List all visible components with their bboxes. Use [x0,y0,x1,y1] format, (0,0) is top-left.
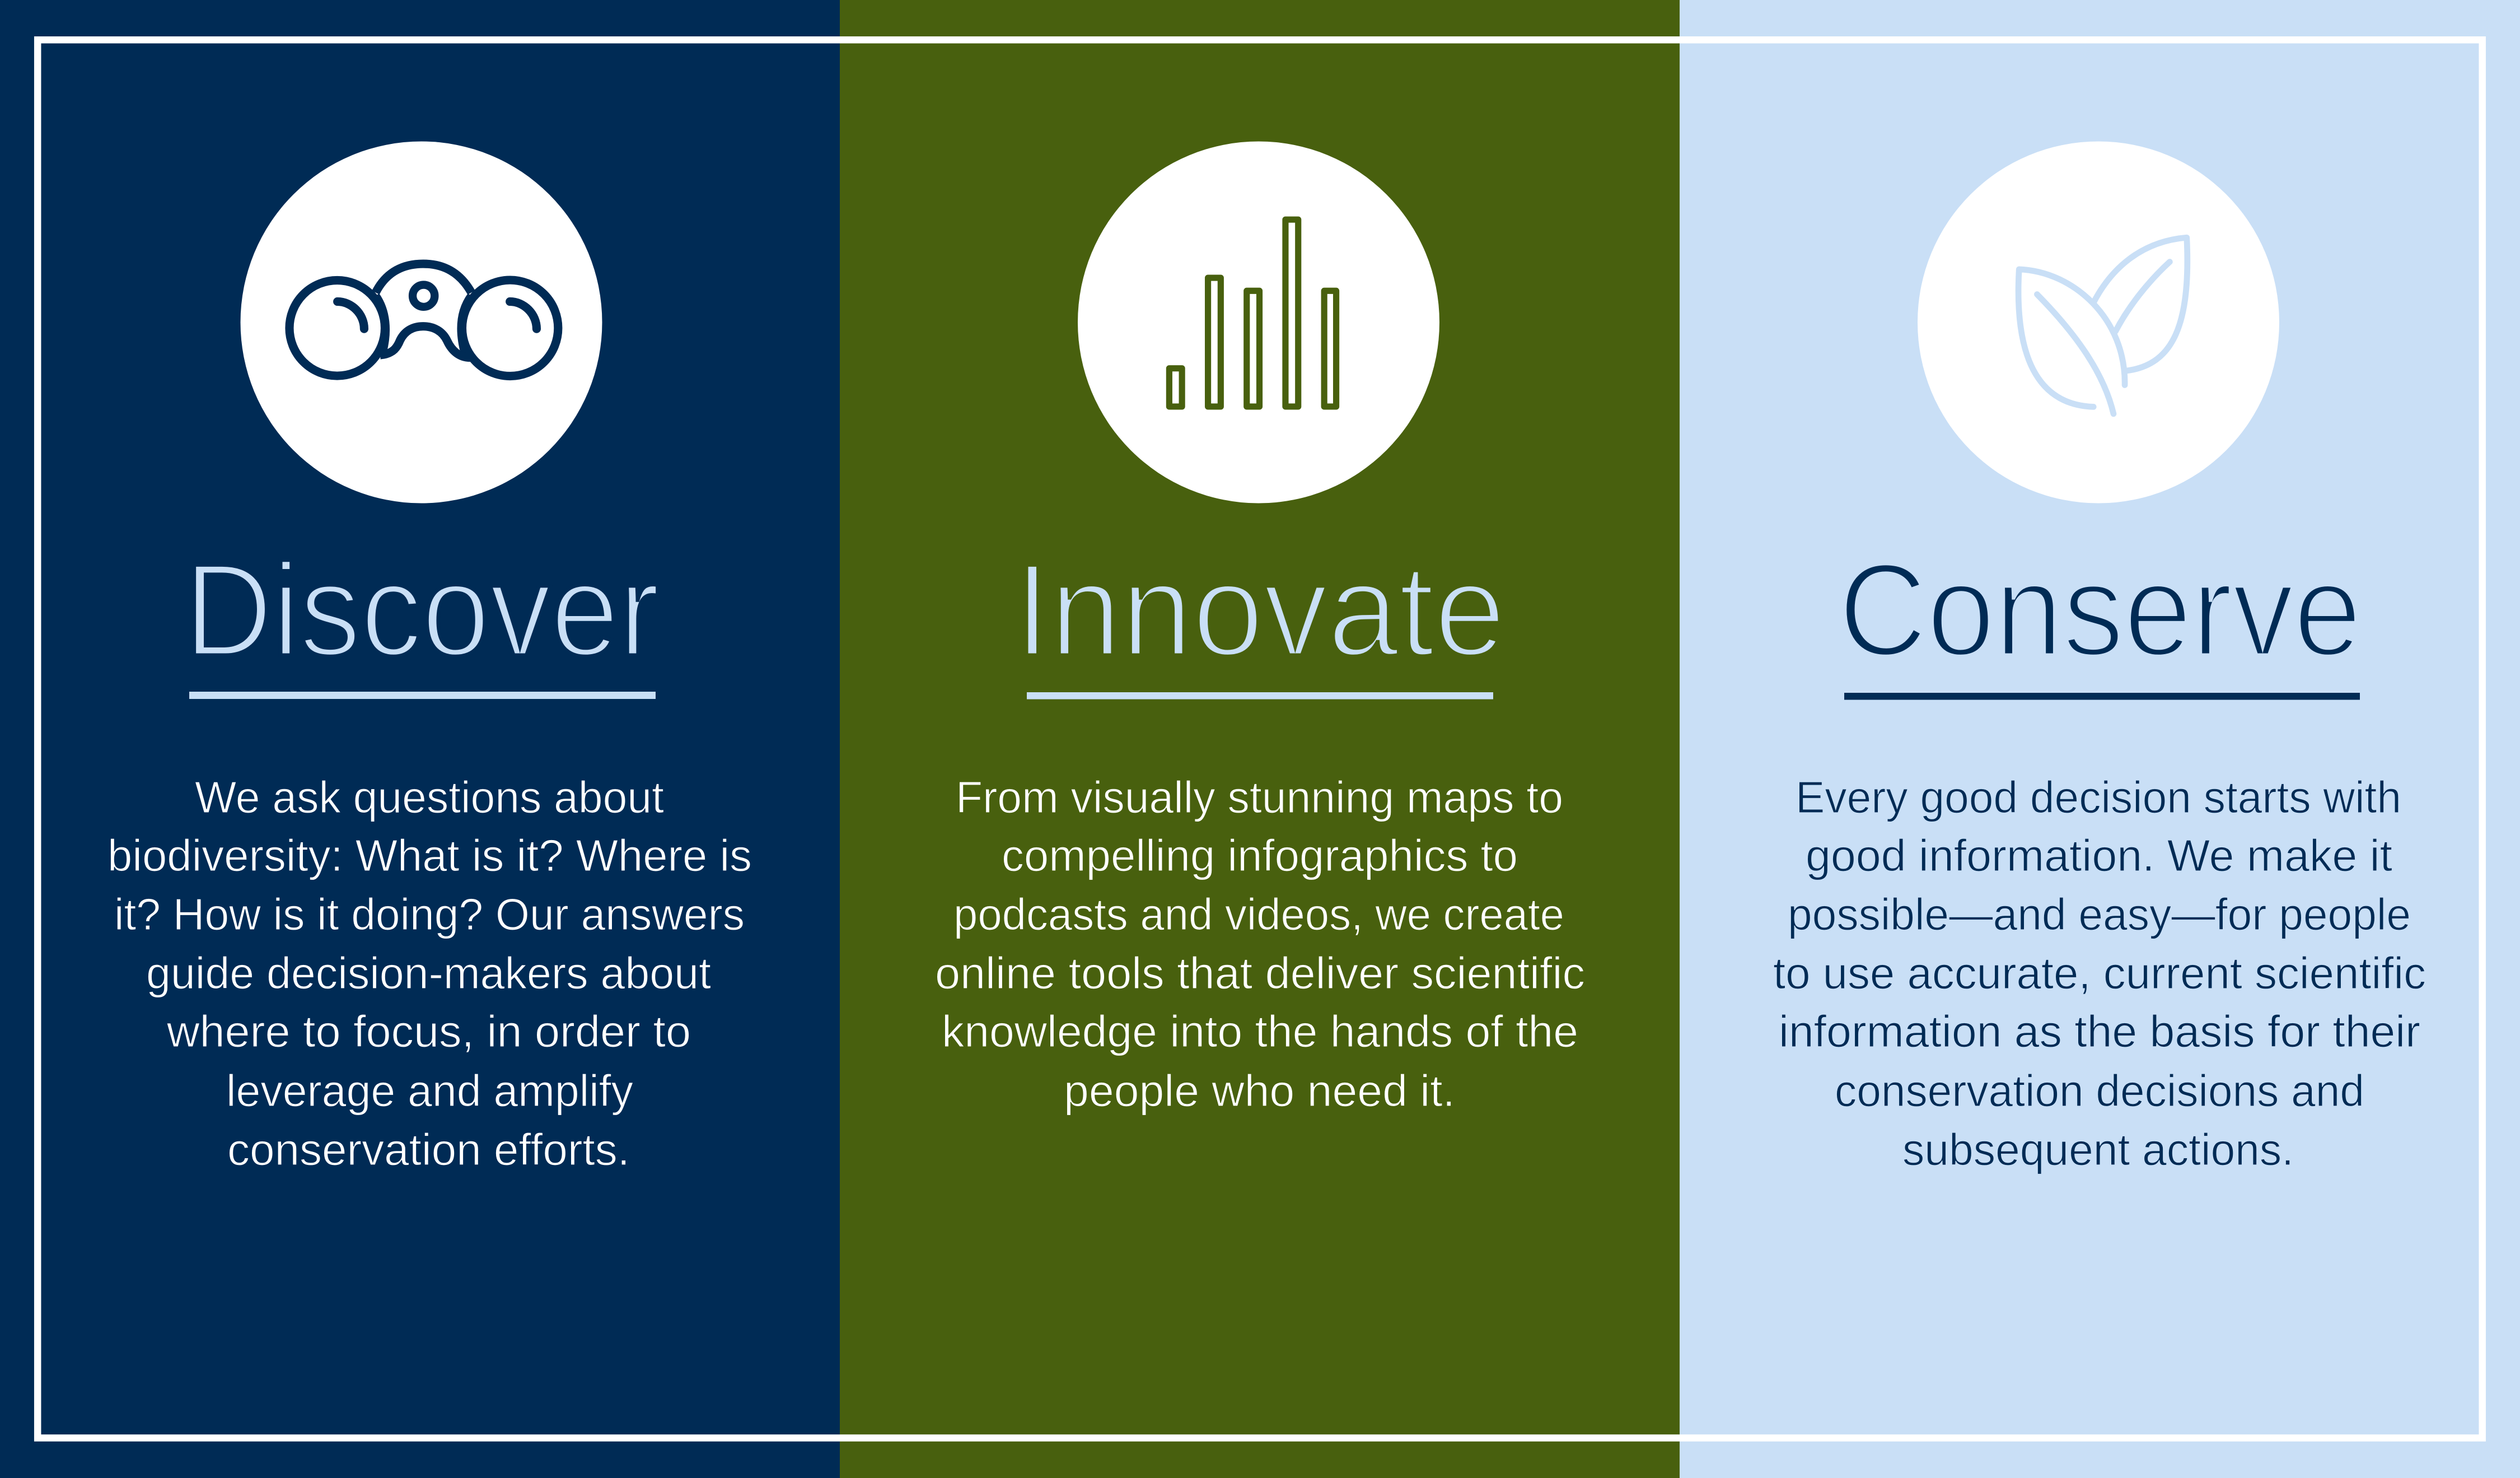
innovate icon circle [1078,141,1439,503]
binoculars outline [289,264,558,376]
discover body text: it? How is it doing? Our answers [114,889,745,939]
discover panel background [0,0,840,1478]
conserve heading rule [1844,693,2360,700]
discover heading rule [189,692,656,699]
icon: binoculars [241,141,602,503]
conserve body text [1773,772,2426,1174]
innovate body text: knowledge into the hands of the [942,1006,1578,1056]
innovate body text: From visually stunning maps to [956,772,1563,822]
icon: bar chart [1078,141,1439,503]
conserve body text: possible—and easy—for people [1788,889,2411,939]
icon: leaves [1918,141,2279,503]
innovate heading rule [1027,692,1493,699]
conserve body text: to use accurate, current scientific [1773,948,2426,998]
conserve body text: conservation decisions and [1835,1066,2364,1116]
discover body text: guide decision-makers about [146,948,711,998]
conserve panel background [1680,0,2520,1478]
discover body text: biodiversity: What is it? Where is [107,831,752,880]
discover body text: where to focus, in order to [166,1006,691,1056]
conserve body text: information as the basis for their [1779,1006,2420,1056]
heading: Innovate: Innovate [1014,536,1506,683]
innovate body text [935,772,1585,1116]
panel: discover [0,0,840,1478]
discover body text: We ask questions about [195,772,664,822]
heading: Discover: Discover [184,536,660,683]
leaves outline [2018,237,2187,414]
innovate body text: compelling infographics to [1002,831,1518,880]
conserve body text: Every good decision starts with [1796,772,2401,822]
innovate body text: people who need it. [1064,1066,1455,1116]
conserve body text: subsequent actions. [1902,1125,2294,1174]
heading: Conserve: Conserve [1839,536,2362,683]
discover body text [107,772,752,1174]
conserve body text: good information. We make it [1806,831,2392,880]
innovate body text: online tools that deliver scientific [935,948,1585,998]
discover body text: leverage and amplify [226,1066,633,1116]
innovate body text: podcasts and videos, we create [953,889,1564,939]
discover icon circle [241,141,602,503]
panel: conserve [1680,0,2520,1478]
discover body text: conservation efforts. [227,1125,630,1174]
conserve icon circle [1918,141,2279,503]
panel: innovate [840,0,1680,1478]
innovate panel background [840,0,1680,1478]
bar chart outline [1169,220,1336,407]
